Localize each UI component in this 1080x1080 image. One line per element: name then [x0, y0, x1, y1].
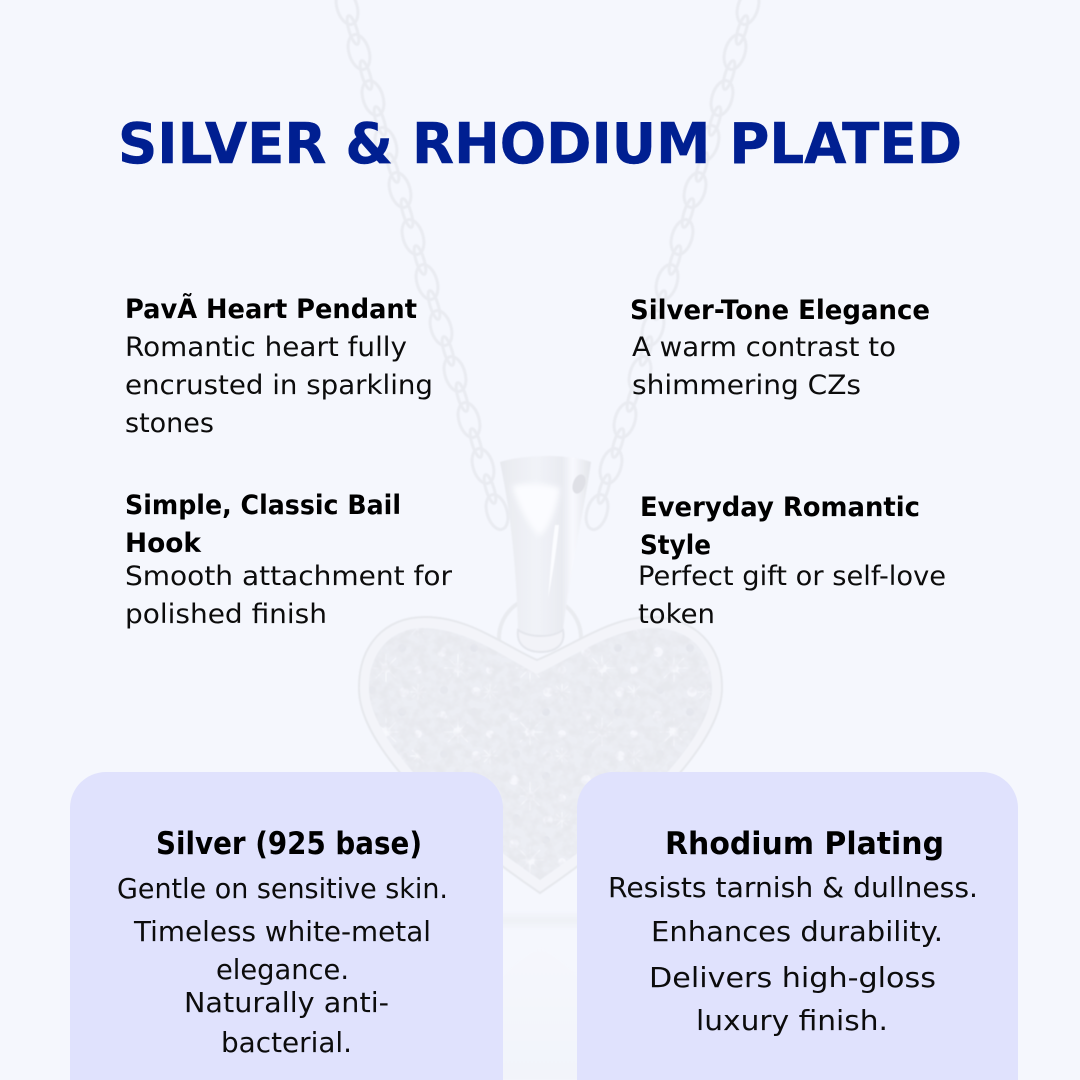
panel text: Silver benefits: Naturally anti-	[184, 987, 389, 1019]
panel text: Silver benefits: Gentle on sensitive skin.	[117, 873, 448, 905]
pendant necklace image	[332, 0, 763, 1080]
panel: Rhodium Plating	[577, 772, 1018, 1080]
feature: Pavé Heart Pendant: Romantic heart fully	[125, 332, 407, 363]
feature: Silver-Tone Elegance: Silver-Tone Elegance	[630, 295, 930, 326]
panel text: Silver benefits: bacterial.	[221, 1027, 352, 1059]
chain: left strand	[332, 0, 512, 532]
title: SILVER & RHODIUM PLATED	[118, 112, 962, 177]
panel heading: Rhodium: Rhodium Plating	[665, 826, 944, 862]
heart pendant	[359, 617, 722, 893]
panel text: Rhodium benefits: Enhances durability.	[651, 916, 943, 948]
feature: Pavé Heart Pendant	[125, 293, 433, 439]
feature: Simple, Classic Bail Hook: Simple, Classic Bail	[125, 490, 401, 521]
panel text: Rhodium benefits: luxury finish.	[696, 1005, 888, 1037]
panel text: Silver benefits	[117, 873, 448, 1059]
feature: Everyday Romantic Style: Everyday Romantic	[640, 492, 920, 523]
panel text: Rhodium benefits: Resists tarnish & dullness.	[608, 872, 978, 904]
feature: Everyday Romantic Style: token	[638, 599, 715, 630]
feature: Simple, Classic Bail Hook: Hook	[125, 528, 202, 559]
feature: Everyday Romantic Style: Style	[640, 530, 711, 561]
chain: right strand	[582, 0, 763, 532]
feature: Simple, Classic Bail Hook: polished finish	[125, 599, 327, 630]
feature: Everyday Romantic Style	[638, 492, 946, 630]
feature: Pavé Heart Pendant: stones	[125, 408, 214, 439]
feature: Silver-Tone Elegance: A warm contrast to	[632, 332, 896, 363]
feature: Everyday Romantic Style: Perfect gift or self-love	[638, 561, 946, 592]
feature: Pavé Heart Pendant: PavÃ Heart Pendant	[125, 293, 417, 325]
feature: Silver-Tone Elegance: shimmering CZs	[632, 370, 861, 401]
panel text: Silver benefits: elegance.	[216, 954, 349, 986]
panel text: Silver benefits: Timeless white-metal	[133, 916, 431, 948]
ring behind bail	[499, 597, 581, 679]
reflection under pendant	[400, 917, 680, 1080]
bail collar	[518, 630, 563, 652]
feature: Pavé Heart Pendant: encrusted in sparkling	[125, 370, 433, 401]
feature: Simple, Classic Bail Hook	[125, 490, 453, 630]
feature: Simple, Classic Bail Hook: Smooth attachment for	[125, 561, 453, 592]
panel: Silver (925 base)	[70, 772, 503, 1080]
panel heading: Silver: Silver (925 base)	[156, 826, 422, 862]
feature: Silver-Tone Elegance	[630, 295, 930, 401]
panel text: Rhodium benefits	[608, 872, 978, 1037]
bail	[500, 456, 591, 652]
panel text: Rhodium benefits: Delivers high-gloss	[649, 962, 936, 994]
